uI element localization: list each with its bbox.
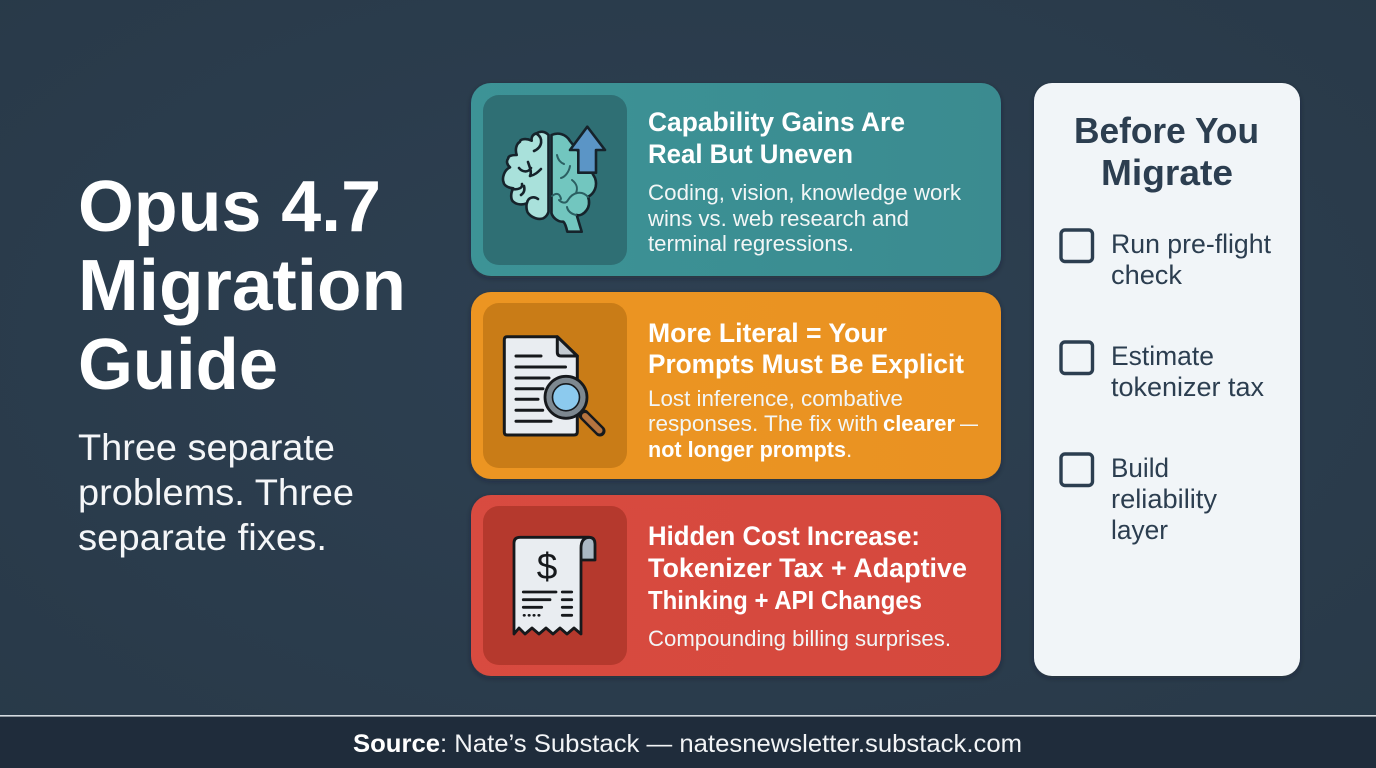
checklist item: reliability layer: reliability: [1111, 484, 1217, 514]
card body: clearer: [883, 411, 955, 436]
card heading: Capability Gains Are: [648, 107, 905, 137]
panel: hidden cost card: [471, 495, 1001, 676]
card heading: Tokenizer Tax + Adaptive: [648, 553, 967, 583]
card body: Lost inference, combative: [648, 386, 903, 411]
checklist item: pre-flight check: Run pre-flight: [1111, 229, 1271, 259]
card heading: Prompts Must Be Explicit: [648, 349, 964, 379]
checklist item: reliability layer: [1061, 453, 1217, 545]
footer source bar: [0, 715, 1376, 768]
card body: not longer prompts: [648, 437, 846, 462]
checklist item: reliability layer: layer: [1111, 515, 1168, 545]
card body: [648, 386, 978, 462]
card heading: [648, 107, 905, 169]
card heading: More Literal = Your: [648, 318, 887, 348]
title: Migration: [78, 246, 406, 326]
card heading: [648, 521, 967, 615]
title: Opus 4.7: [78, 167, 381, 247]
card heading: Real But Uneven: [648, 139, 853, 169]
card body: terminal regressions.: [648, 231, 854, 256]
card body: —: [960, 411, 978, 436]
checklist item: tokenizer tax: [1061, 341, 1264, 402]
checklist item: pre-flight check: check: [1111, 260, 1182, 290]
subtitle: problems. Three: [78, 471, 354, 513]
card body: wins vs. web research and: [647, 206, 909, 231]
subtitle: separate fixes.: [78, 516, 327, 558]
footer source bar: Source: [353, 730, 440, 758]
panel: capability gains card: [471, 83, 1001, 276]
card body: Coding, vision, knowledge work: [648, 180, 962, 205]
card body: .: [846, 437, 852, 462]
checklist heading: [1074, 110, 1259, 193]
card body: [647, 180, 962, 256]
subtitle: Three separate: [78, 426, 335, 468]
footer source bar: : Nate’s Substack — natesnewsletter.substack.com: [440, 730, 1022, 758]
icon: receipt with dollar sign: $: [537, 546, 557, 587]
panel: before you migrate checklist: [1034, 83, 1300, 676]
checklist heading: Migrate: [1101, 152, 1233, 193]
card body: responses. The fix with: [648, 411, 878, 436]
panel: literal prompts card: [471, 292, 1001, 479]
card heading: Hidden Cost Increase:: [648, 521, 920, 551]
card body: Compounding billing surprises.: [648, 626, 951, 651]
card heading: Thinking + API Changes: [648, 585, 922, 615]
subtitle: [78, 426, 354, 558]
checklist item: reliability layer: Build: [1111, 453, 1169, 483]
icon: document with magnifying glass: [504, 337, 600, 435]
title: Guide: [78, 325, 278, 405]
checklist item: tokenizer tax: tokenizer tax: [1111, 372, 1264, 402]
checklist item: tokenizer tax: Estimate: [1111, 341, 1214, 371]
icon: brain with up arrow: [503, 127, 605, 232]
card heading: [648, 318, 964, 379]
title: [78, 167, 406, 405]
checklist heading: Before You: [1074, 110, 1259, 151]
icon: receipt with dollar sign: [514, 537, 595, 634]
checklist item: pre-flight check: [1061, 229, 1271, 290]
